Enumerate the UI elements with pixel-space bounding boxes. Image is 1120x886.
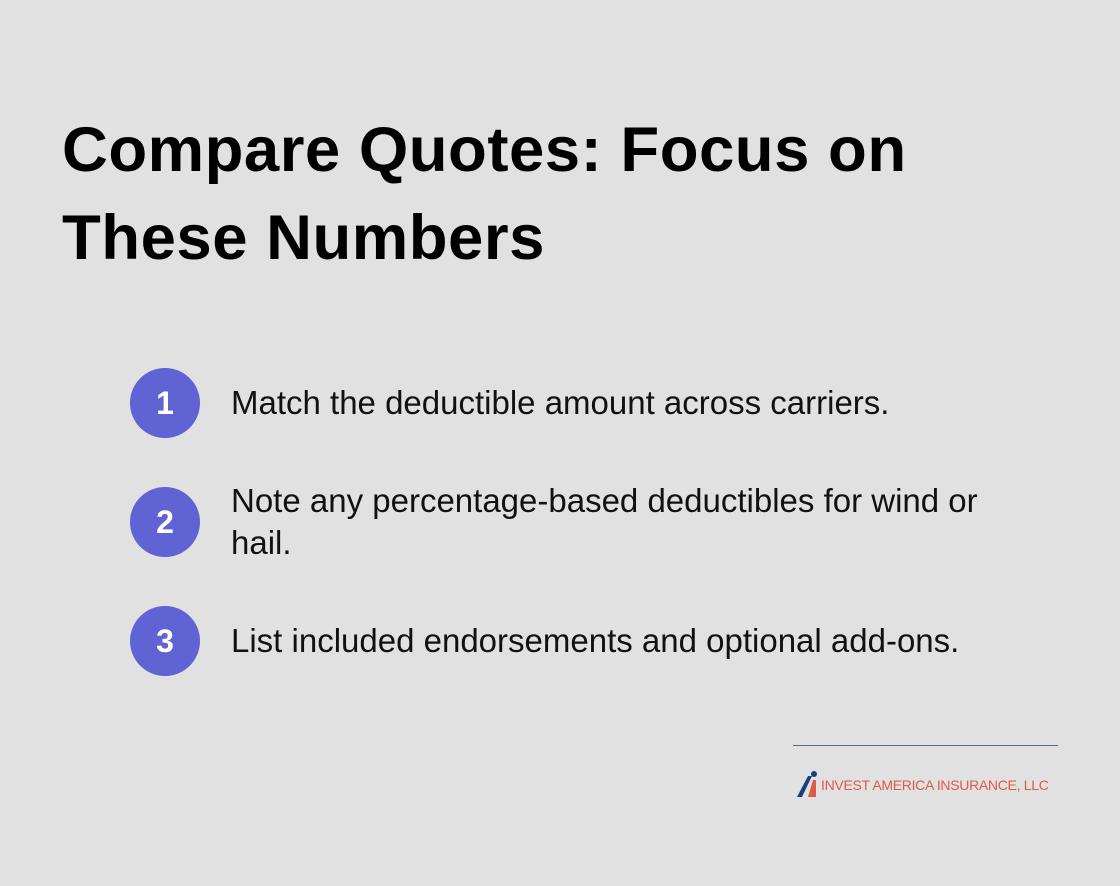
badge 2 xyxy=(130,487,200,557)
item 1 xyxy=(130,368,889,438)
item 2 xyxy=(130,482,978,561)
title xyxy=(62,115,907,273)
icon: logo mark xyxy=(797,771,817,797)
logo xyxy=(797,771,1049,797)
text 3: List included endorsements and optional add-ons. xyxy=(231,622,959,659)
badge 1: 1 xyxy=(156,385,174,421)
badge 1 xyxy=(130,368,200,438)
company name: INVEST AMERICA INSURANCE, LLC xyxy=(821,777,1049,793)
text 1: Match the deductible amount across carriers. xyxy=(231,384,889,421)
title: These Numbers xyxy=(62,203,545,273)
badge 3 xyxy=(130,606,200,676)
text 2: Note any percentage-based deductibles for wind or hail. xyxy=(231,482,978,561)
title: Compare Quotes: Focus on xyxy=(62,115,907,185)
badge 3: 3 xyxy=(156,623,174,659)
item 3 xyxy=(130,606,959,676)
badge 2: 2 xyxy=(156,504,174,540)
